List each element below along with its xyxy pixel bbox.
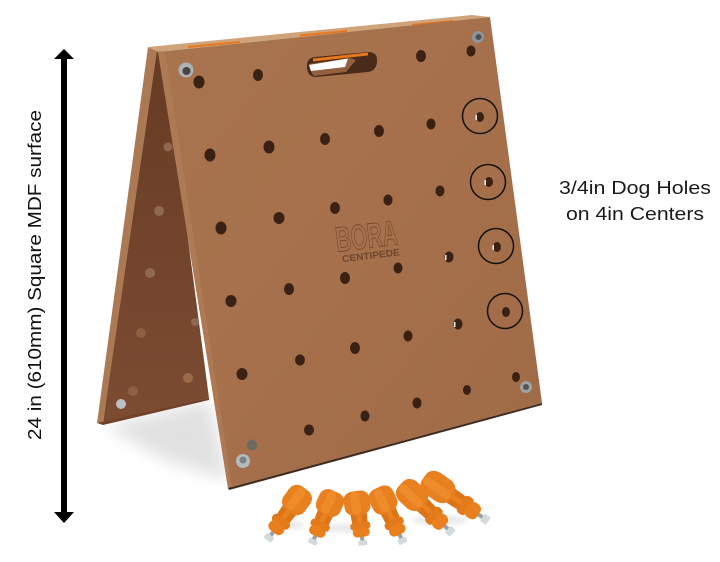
bench dog 6 [417, 467, 496, 532]
orange top edge strips [188, 20, 453, 48]
BORA Centipede logo engraving: BORA [333, 214, 400, 260]
peg shadows [276, 515, 468, 533]
bench dog 1 [257, 481, 316, 548]
back panel of the A-frame [97, 47, 209, 425]
corner bolts [178, 31, 532, 468]
dog holes grid [194, 46, 520, 450]
bench dog 4 [365, 482, 415, 549]
bench dog 2 [300, 486, 347, 549]
bench dog 3 [342, 489, 376, 547]
BORA Centipede logo engraving: CENTIPEDE [342, 247, 400, 265]
white glints in right-hand holes [445, 115, 494, 327]
front panel MDF board [148, 15, 542, 490]
BORA Centipede logo engraving [333, 214, 400, 266]
dog hole callout text [559, 177, 711, 224]
bench dog 5 [392, 475, 462, 543]
back panel holes [116, 142, 199, 409]
dog hole callout text: on 4in Centers [566, 203, 704, 224]
table shadow under the board [104, 400, 230, 480]
dimension label: 24 in (610mm) Square MDF surface [24, 110, 45, 440]
callout circles on four dog holes [462, 98, 522, 328]
handle slot [307, 52, 377, 77]
orange bench dogs with screws [257, 467, 496, 549]
dog hole callout text: 3/4in Dog Holes [559, 177, 711, 198]
dimension arrow [54, 49, 74, 523]
